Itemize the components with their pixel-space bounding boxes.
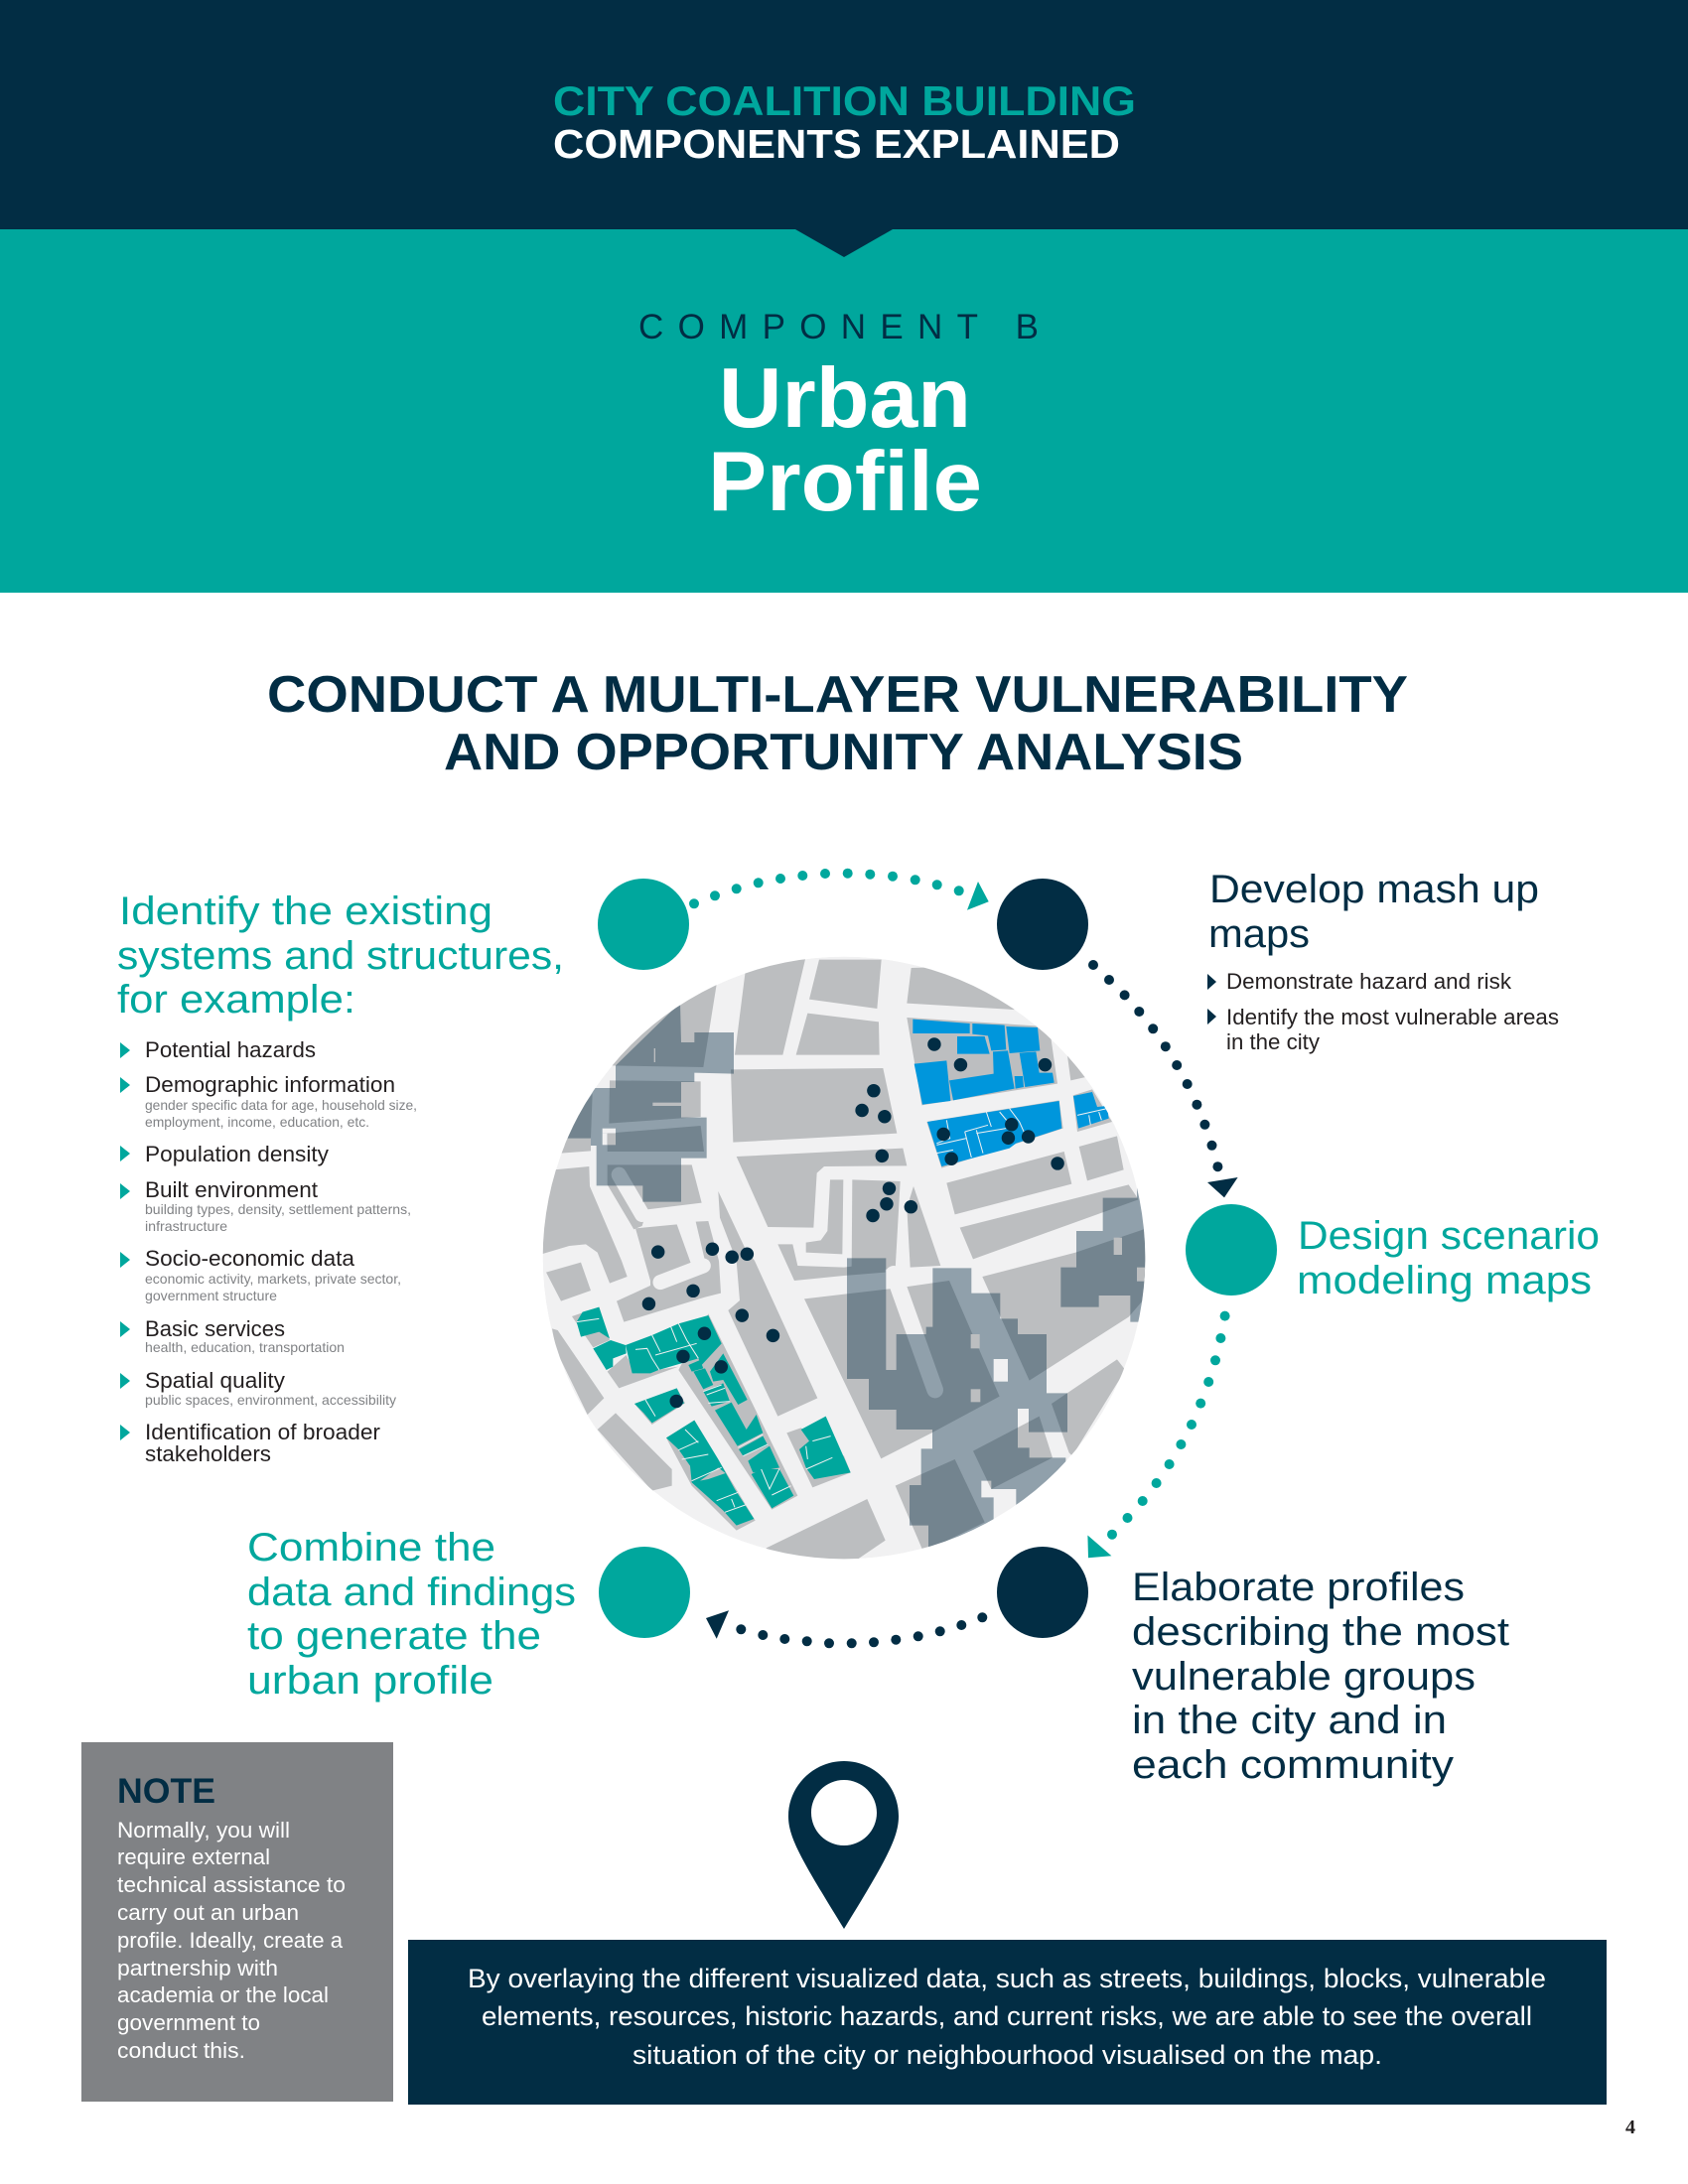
list item: built environment: [120, 1177, 411, 1234]
note body: conduct this.: [117, 2038, 245, 2063]
list: mash up map bullets: in the city: [1226, 1029, 1320, 1054]
note body: [117, 1818, 346, 2063]
list item: spatial quality: [120, 1368, 396, 1408]
panel: teal title band: [0, 229, 1688, 593]
component title: [708, 351, 982, 529]
cycle node: teal top left: [598, 879, 689, 970]
text: combine the data: [247, 1526, 576, 1703]
panel: overlay summary: By overlaying the different visualized data, such as streets, buildings, blocks, vulnerable: [468, 1964, 1546, 1993]
panel: navy header band: [0, 0, 1688, 257]
list item: built environment: infrastructure: [145, 1218, 227, 1234]
list item: built environment: building types, density, settlement patterns,: [145, 1201, 411, 1217]
cycle node: teal right: [1186, 1204, 1277, 1296]
map layer: vulnerable blue blocks: [913, 1020, 1109, 1166]
note body: government to: [117, 2010, 260, 2035]
text: identify systems heading: systems and structures,: [117, 934, 564, 978]
note body: Normally, you will: [117, 1818, 290, 1843]
arrow: dotted right lower arc: [1087, 1311, 1230, 1558]
list item: demographic information: employment, income, education, etc.: [145, 1114, 369, 1130]
header title: CITY COALITION BUILDING: [553, 77, 1136, 124]
text: design scenario modeling maps: [1297, 1214, 1600, 1302]
text: combine the data: to generate the: [247, 1614, 541, 1658]
note heading: NOTE: [117, 1772, 215, 1811]
text: develop mash up maps: Develop mash up: [1209, 868, 1539, 911]
list item: broader stakeholders: stakeholders: [145, 1441, 271, 1466]
note body: require external: [117, 1844, 270, 1869]
list item: socio-economic data: economic activity, markets, private sector,: [145, 1271, 401, 1287]
list: mash up map bullets: [1207, 969, 1559, 1054]
map layer: vulnerable teal blocks: [577, 1307, 851, 1526]
cycle node: navy top right: [997, 879, 1088, 970]
text: elaborate profiles: vulnerable groups: [1132, 1655, 1476, 1699]
list: mash up map bullets: Demonstrate hazard and risk: [1226, 969, 1512, 994]
text: elaborate profiles: describing the most: [1132, 1610, 1509, 1654]
text: combine the data: data and findings: [247, 1570, 576, 1614]
list item: broader stakeholders: Identification of broader: [145, 1420, 380, 1444]
text: combine the data: urban profile: [247, 1659, 493, 1703]
note body: profile. Ideally, create a: [117, 1928, 344, 1953]
main heading: [267, 666, 1408, 781]
text: develop mash up maps: [1208, 868, 1539, 956]
text: elaborate profiles: Elaborate profiles: [1132, 1566, 1465, 1609]
text: elaborate profiles: in the city and in: [1132, 1699, 1447, 1742]
list item: socio-economic data: government structure: [145, 1288, 277, 1303]
note body: technical assistance to: [117, 1872, 346, 1897]
list item: basic services: [120, 1316, 345, 1355]
text: identify systems heading: [117, 889, 564, 1022]
map layer: hazard holes: [603, 1048, 1145, 1402]
text: design scenario modeling maps: modeling maps: [1297, 1259, 1592, 1302]
text: design scenario modeling maps: Design scenario: [1298, 1214, 1600, 1258]
icon: map pin: [788, 1761, 899, 1929]
list item: socio-economic data: [120, 1246, 401, 1303]
component title: Urban: [719, 351, 971, 446]
arrow: dotted top arc: [689, 869, 989, 910]
text: combine the data: Combine the: [247, 1526, 495, 1570]
list item: spatial quality: public spaces, environment, accessibility: [145, 1392, 396, 1408]
map layer: street blocks: [536, 956, 1149, 1569]
list item: demographic information: gender specific data for age, household size,: [145, 1097, 417, 1113]
cycle node: teal bottom left: [599, 1547, 690, 1638]
list: existing systems: [120, 1037, 417, 1466]
panel: overlay summary: elements, resources, historic hazards, and current risks, we are able to see the overall: [482, 2001, 1532, 2031]
list item: potential hazards: Potential hazards: [145, 1037, 316, 1062]
list item: built environment: Built environment: [145, 1177, 318, 1202]
main heading: AND OPPORTUNITY ANALYSIS: [444, 724, 1243, 781]
note body: academia or the local: [117, 1982, 329, 2007]
list item: broader stakeholders: [120, 1420, 380, 1466]
map layer: hazard zones: [556, 1003, 1149, 1552]
list item: basic services: health, education, transportation: [145, 1339, 345, 1355]
list: mash up map bullets: Identify the most vulnerable areas: [1226, 1005, 1559, 1029]
list item: spatial quality: Spatial quality: [145, 1368, 285, 1393]
list item: socio-economic data: Socio-economic data: [145, 1246, 355, 1271]
page number: 4: [1625, 2116, 1635, 2138]
main heading: CONDUCT A MULTI-LAYER VULNERABILITY: [267, 666, 1408, 724]
note body: partnership with: [117, 1956, 278, 1980]
text: identify systems heading: Identify the existing: [119, 889, 492, 933]
panel: overlay summary: [408, 1940, 1607, 2105]
list item: basic services: Basic services: [145, 1316, 285, 1341]
list item: demographic information: Demographic information: [145, 1072, 395, 1097]
list item: population density: Population density: [145, 1142, 329, 1166]
map layer: road stubs: [619, 1174, 935, 1390]
header title: [553, 77, 1136, 167]
map: layered city circle: [536, 956, 1149, 1569]
text: elaborate profiles: [1132, 1566, 1509, 1787]
map layer: location dots: [642, 1037, 1064, 1408]
text: identify systems heading: for example:: [117, 978, 355, 1022]
component label: COMPONENT B: [638, 308, 1039, 346]
note body: carry out an urban: [117, 1900, 299, 1925]
list item: demographic information: [120, 1072, 417, 1130]
panel: overlay summary: situation of the city or neighbourhood visualised on the map.: [633, 2040, 1382, 2070]
text: elaborate profiles: each community: [1132, 1743, 1454, 1787]
arrow: dotted right upper arc: [1088, 960, 1238, 1197]
component title: Profile: [708, 435, 982, 529]
arrow: dotted bottom arc: [706, 1610, 987, 1648]
panel: note: [81, 1742, 393, 2102]
header title: COMPONENTS EXPLAINED: [553, 121, 1120, 167]
text: develop mash up maps: maps: [1208, 912, 1310, 956]
cycle node: navy bottom right: [997, 1547, 1088, 1638]
